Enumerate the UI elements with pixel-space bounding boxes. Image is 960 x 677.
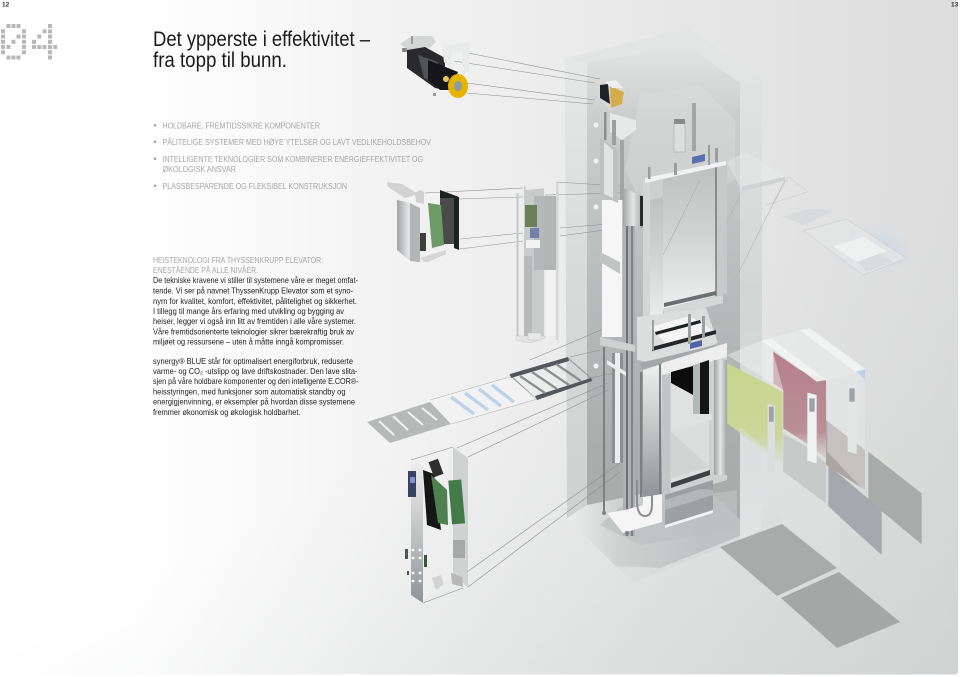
bullet list: INTELLIGENTE TEKNOLOGIER SOM KOMBINERER ENERGIEFFEKTIVITET OG	[162, 154, 423, 164]
motor exploded view	[400, 36, 469, 98]
body heading	[153, 255, 323, 275]
elevator car top	[637, 308, 718, 369]
title	[153, 28, 370, 72]
body paragraph 2: synergy® BLUE står for optimalisert energiforbruk, reduserte	[153, 356, 353, 366]
body paragraph 1: tende. Vi ser på navnet ThyssenKrupp Elevator som et syno-	[153, 285, 353, 295]
elevator shaft	[565, 28, 762, 583]
bullet list	[154, 120, 431, 191]
body paragraph 2: heisstyringen, med funksjoner som automatisk standby og	[153, 386, 346, 396]
body paragraph 1: miljøet og ressursene – uten å måtte inngå kompromisser.	[153, 336, 344, 346]
ceiling grid plate dark	[510, 357, 592, 400]
page number right: 13	[951, 2, 959, 8]
bullet list: ØKOLOGISK ANSVAR	[162, 164, 236, 174]
body paragraph 2: varme- og CO₂ -utslipp og lave driftskostnader. Den lave slita-	[153, 366, 358, 376]
body paragraph 2: fremmer økonomisk og økologisk holdbarhet.	[153, 407, 300, 417]
body paragraph 2: energigjenvinning, er eksempler på hvordan disse systemene	[153, 396, 355, 406]
elevator illustration	[367, 28, 922, 648]
guide rail and counterweight assembly	[594, 112, 643, 536]
lower landing door frame	[662, 343, 727, 528]
wall panels	[727, 328, 922, 567]
bullet list: HOLDBARE, FREMTIDSSIKRE KOMPONENTER	[162, 120, 320, 130]
body paragraph 2	[153, 356, 359, 417]
body paragraph 1: De tekniske kravene vi stiller til systemene våre er meget omfat-	[153, 275, 358, 285]
bullet list: PÅLITELIGE SYSTEMER MED HØYE YTELSER OG LAVT VEDLIKEHOLDSBEHOV	[162, 137, 431, 147]
upper landing door	[643, 103, 727, 323]
page number left: 12	[2, 2, 10, 8]
control unit exploded view	[387, 182, 459, 262]
elevator car and base	[602, 364, 662, 535]
ceiling plate with blue light	[430, 377, 537, 424]
body heading: HEISTEKNOLOGI FRA THYSSENKRUPP ELEVATOR:	[153, 255, 323, 265]
bullet list: PLASSBESPARENDE OG FLEKSIBEL KONSTRUKSJON	[162, 181, 347, 191]
ghost ceiling plates right	[727, 152, 915, 275]
connector lines	[411, 53, 785, 603]
body paragraph 1: Våre fremtidsorienterte teknologier sikrer bærekraftig bruk av	[153, 326, 355, 336]
chapter number 04 in pixel squares	[1, 24, 57, 60]
body paragraph 1: heiser, legger vi også inn litt av fremtiden i alle våre systemer.	[153, 316, 356, 326]
title: Det ypperste i effektivitet –	[153, 28, 370, 51]
elevator motor in shaft	[598, 80, 625, 110]
body paragraph 2: sjen på våre holdbare komponenter og den intelligente E.COR®-	[153, 376, 359, 386]
ceiling plate grey	[367, 402, 451, 443]
landing panel exploded view	[405, 447, 468, 603]
title: fra topp til bunn.	[153, 49, 287, 72]
body paragraph 1: nym for kvalitet, komfort, effektivitet, pålitelighet og sikkerhet.	[153, 296, 357, 306]
body heading: ENESTÅENDE PÅ ALLE NIVÅER.	[153, 265, 258, 275]
floor plates	[720, 524, 900, 648]
body paragraph 1: I tillegg til mange års erfaring med utvikling og bygging av	[153, 306, 345, 316]
body paragraph 1	[153, 275, 358, 346]
rail column exploded view	[516, 174, 558, 343]
